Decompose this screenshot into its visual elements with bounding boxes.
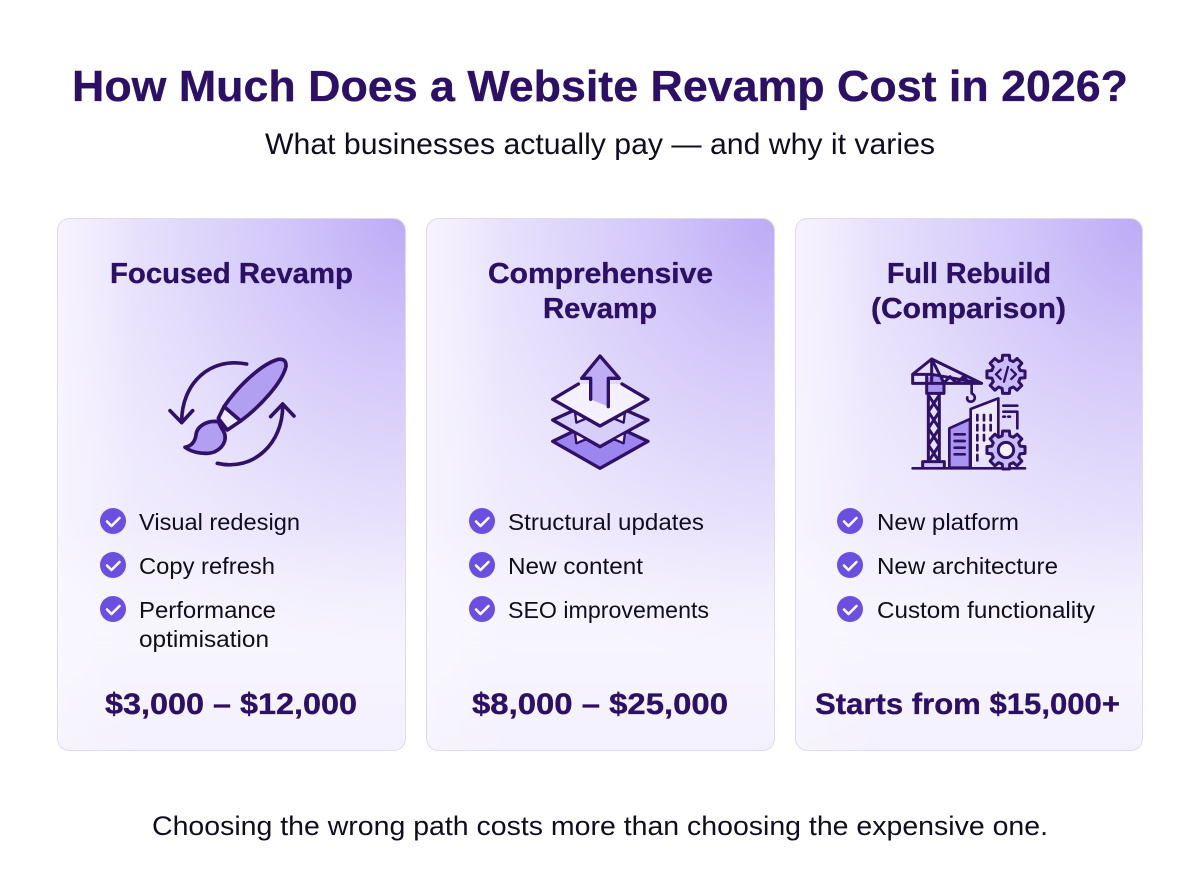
item: new architecture: New architecture (877, 553, 1058, 579)
icon: stacked layers with up arrow (553, 356, 648, 468)
checklist: focused revamp (100, 508, 300, 652)
icon: crane, buildings and gears (913, 355, 1025, 469)
check icon (837, 508, 863, 534)
heading: full rebuild: Full Rebuild (887, 258, 1051, 290)
check icon (100, 596, 126, 622)
crane (913, 359, 982, 468)
item: seo improvements: SEO improvements (508, 597, 709, 623)
title: How Much Does a Website Revamp Cost in 2026? (72, 62, 1128, 111)
buildings (949, 398, 1017, 468)
heading: comprehensive revamp (488, 258, 713, 325)
check icon (469, 552, 495, 578)
price: focused revamp: $3,000 – $12,000 (105, 688, 357, 721)
item: performance optimisation: Performance (139, 597, 276, 623)
checklist: comprehensive revamp (469, 508, 709, 623)
icon: paintbrush with cycle arrows (170, 359, 294, 465)
heading: focused revamp: Focused Revamp (110, 258, 353, 290)
heading: comprehensive revamp: Revamp (543, 293, 657, 325)
heading: comprehensive revamp: Comprehensive (488, 258, 713, 290)
gear: code (987, 355, 1025, 393)
item: structural updates: Structural updates (508, 509, 704, 535)
item: copy refresh: Copy refresh (139, 553, 275, 579)
price: full rebuild: Starts from $15,000+ (815, 688, 1120, 721)
subtitle: What businesses actually pay — and why it varies (265, 128, 935, 161)
checklist: full rebuild (837, 508, 1096, 623)
item: performance optimisation: optimisation (139, 626, 269, 652)
gear: cog (987, 431, 1025, 469)
check icon (469, 596, 495, 622)
check icon (837, 596, 863, 622)
check icon (100, 508, 126, 534)
panel: focused revamp (58, 218, 406, 750)
item: performance optimisation (139, 597, 276, 652)
heading: full rebuild (871, 258, 1066, 325)
heading: full rebuild: (Comparison) (871, 293, 1066, 325)
item: visual redesign: Visual redesign (139, 509, 300, 535)
item: custom functionality: Custom functionality (877, 597, 1096, 623)
footer note: Choosing the wrong path costs more than choosing the expensive one. (152, 811, 1048, 841)
check icon (100, 552, 126, 578)
check icon (837, 552, 863, 578)
price: comprehensive revamp: $8,000 – $25,000 (472, 688, 728, 721)
panel: comprehensive revamp (426, 218, 774, 750)
panel: full rebuild (796, 218, 1142, 750)
ground line (913, 464, 1025, 472)
check icon (469, 508, 495, 534)
item: new content: New content (508, 553, 644, 579)
item: new platform: New platform (877, 509, 1019, 535)
